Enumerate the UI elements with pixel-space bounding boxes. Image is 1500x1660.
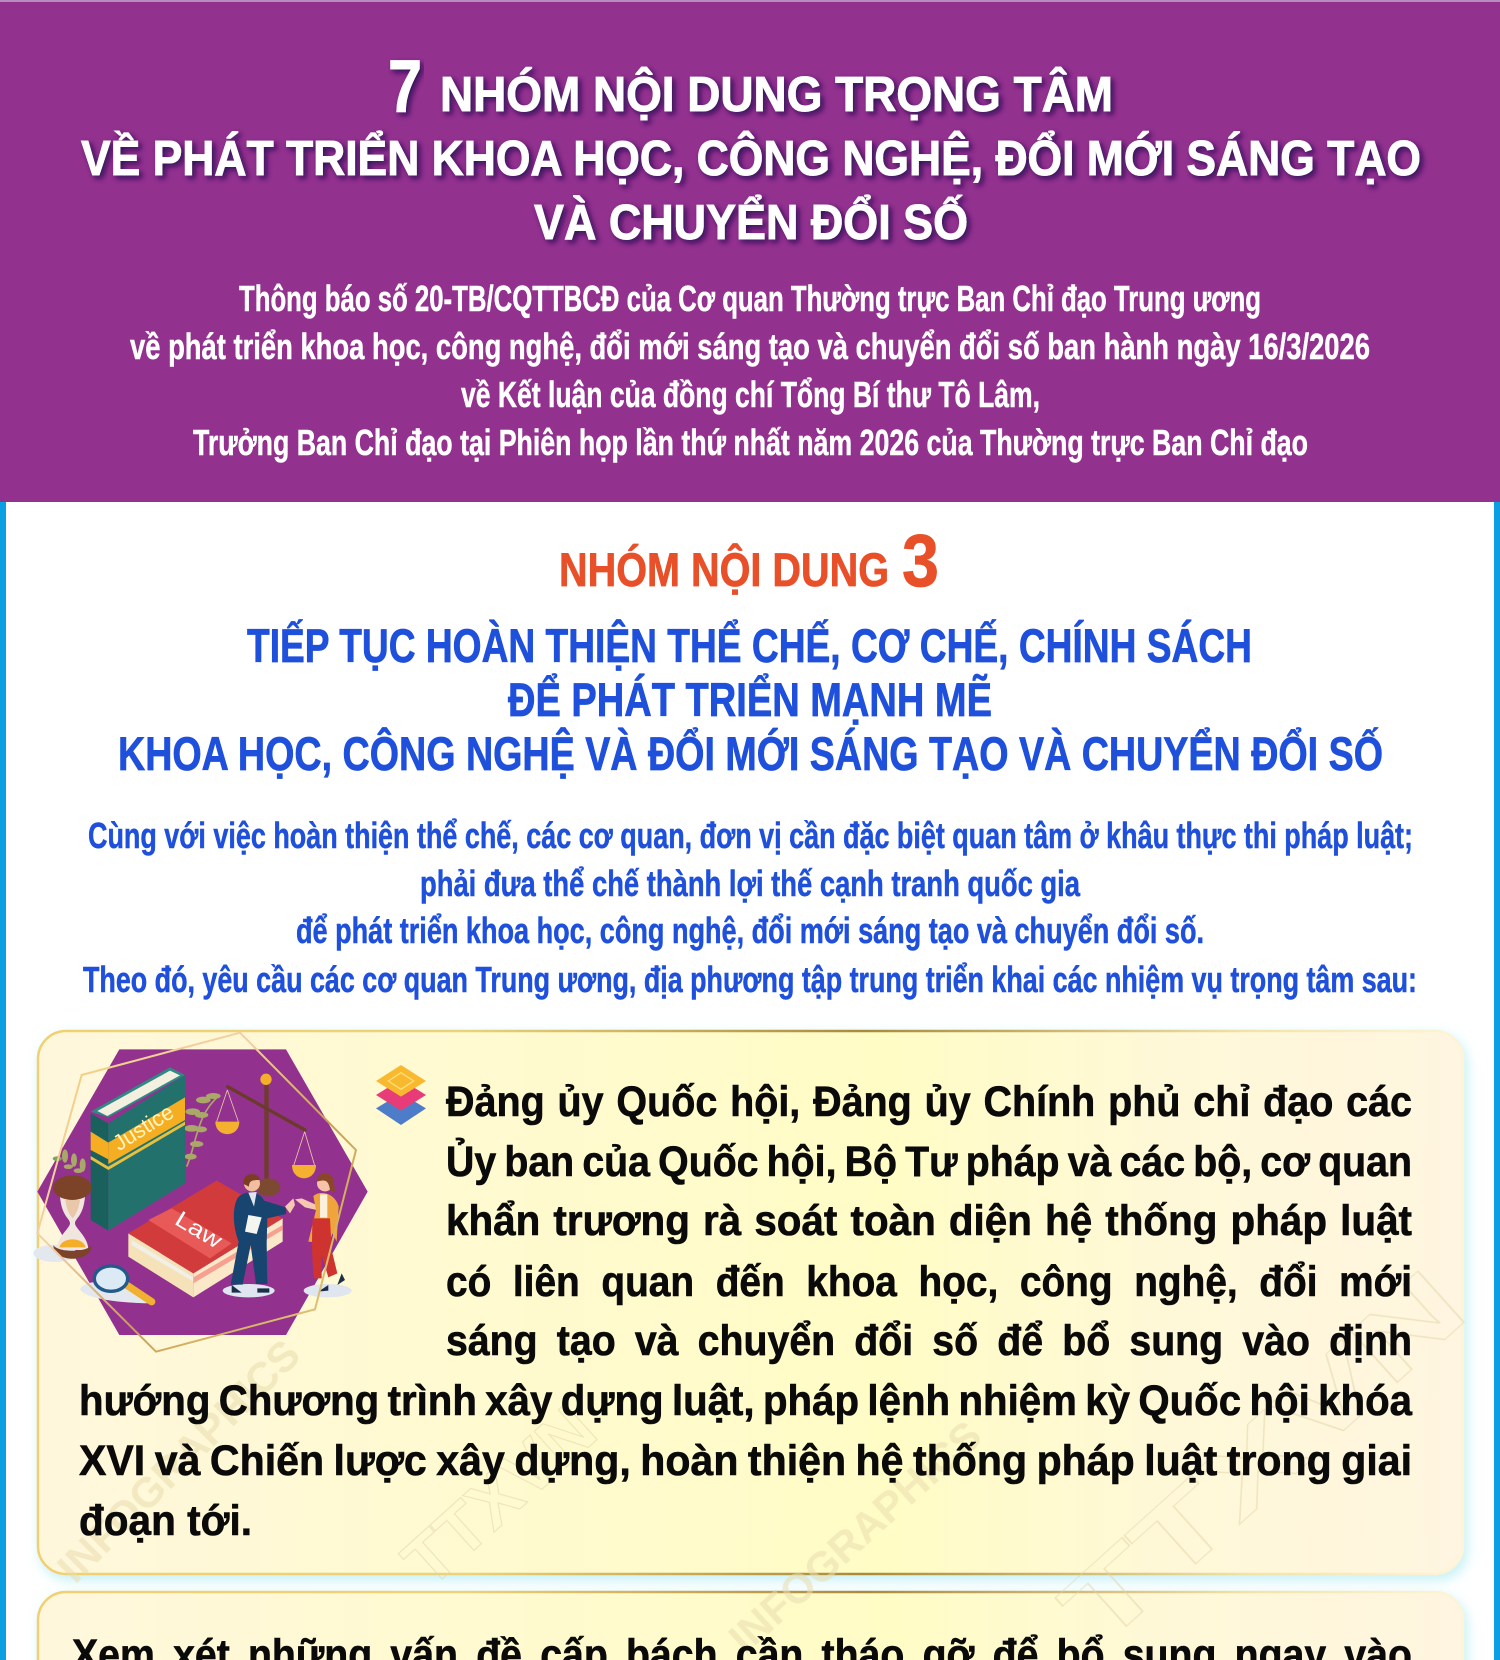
book: justice bbox=[91, 1067, 185, 1231]
group heading: 3 bbox=[902, 519, 939, 602]
hourglass bbox=[33, 1175, 92, 1262]
subtitle: về Kết luận của đồng chí Tổng Bí thư Tô Lâm, bbox=[461, 374, 1040, 415]
panel 2 background bbox=[38, 1592, 1463, 1660]
illustration: justice and law bbox=[33, 1033, 368, 1352]
watermark: INFOGRAPHICS bbox=[720, 1411, 990, 1660]
intro text bbox=[83, 815, 1417, 1000]
subtitle bbox=[130, 278, 1370, 463]
panel 1 text: Ủy ban của Quốc hội, Bộ Tư pháp và các bộ, cơ quan bbox=[446, 1137, 1412, 1186]
intro text: để phát triển khoa học, công nghệ, đổi mới sáng tạo và chuyển đổi số. bbox=[296, 910, 1204, 951]
left blue edge bbox=[0, 500, 6, 1660]
group heading: NHÓM NỘI DUNG bbox=[559, 543, 889, 596]
panel 1 text: XVI và Chiến lược xây dựng, hoàn thiện hệ thống pháp luật trong giai bbox=[79, 1437, 1412, 1485]
panel 1 text: Đảng ủy Quốc hội, Đảng ủy Chính phủ chỉ đạo các bbox=[446, 1078, 1412, 1126]
blue heading: ĐỂ PHÁT TRIỂN MẠNH MẼ bbox=[508, 673, 992, 726]
title: 7 bbox=[388, 45, 422, 128]
title: VÀ CHUYỂN ĐỔI SỐ bbox=[534, 195, 968, 250]
watermark: TTXVN bbox=[1040, 1249, 1486, 1660]
book: justice: Justice bbox=[108, 1099, 178, 1156]
title: NHÓM NỘI DUNG TRỌNG TÂM bbox=[440, 67, 1113, 122]
panel 1 background bbox=[38, 1031, 1463, 1574]
panel 1 text: có liên quan đến khoa học, công nghệ, đổi mới bbox=[446, 1258, 1412, 1306]
book: law bbox=[128, 1181, 283, 1297]
panel 1 text: khẩn trương rà soát toàn diện hệ thống pháp luật bbox=[446, 1197, 1412, 1245]
watermark bbox=[48, 1249, 1486, 1660]
intro text: phải đưa thể chế thành lợi thế cạnh tranh quốc gia bbox=[420, 863, 1081, 904]
panel 1 text: sáng tạo và chuyển đổi số để bổ sung vào định bbox=[446, 1317, 1412, 1365]
group heading bbox=[559, 519, 939, 602]
book: law: Law bbox=[171, 1205, 228, 1254]
panel 1 text bbox=[79, 1078, 1413, 1545]
panel 1 text: hướng Chương trình xây dựng luật, pháp lệnh nhiệm kỳ Quốc hội khóa bbox=[79, 1377, 1413, 1425]
right blue edge bbox=[1494, 500, 1500, 1660]
blue heading: TIẾP TỤC HOÀN THIỆN THỂ CHẾ, CƠ CHẾ, CHÍNH SÁCH bbox=[247, 619, 1252, 672]
header panel bbox=[0, 0, 1500, 502]
leaves bbox=[53, 1093, 221, 1173]
gold outline bbox=[37, 1033, 356, 1352]
scales bbox=[215, 1074, 316, 1196]
man figure bbox=[223, 1174, 295, 1297]
blue heading bbox=[118, 619, 1383, 780]
icon: stacked layers bbox=[376, 1065, 426, 1125]
woman figure bbox=[295, 1173, 352, 1297]
magnifier bbox=[80, 1266, 155, 1303]
watermark: TTXVN bbox=[388, 1390, 611, 1601]
icon: purple hexagon bbox=[37, 1049, 368, 1335]
title bbox=[81, 45, 1421, 250]
panel 1 text: đoạn tới. bbox=[79, 1497, 252, 1545]
watermark: INFOGRAPHICS bbox=[48, 1330, 309, 1591]
